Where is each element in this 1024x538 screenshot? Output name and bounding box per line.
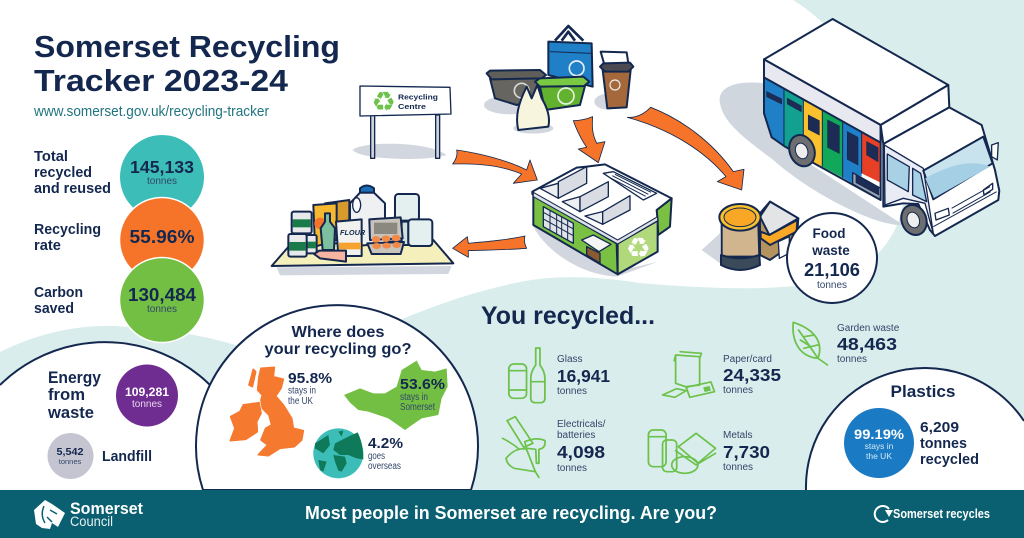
stat: recycling rate: rate [34,237,61,254]
callout: food waste: Food [812,226,846,241]
arrow: sorting centre to products [453,236,527,257]
item: glass: Glass [557,354,583,365]
front wheel [897,201,931,239]
logo: Somerset recycles: Somerset recycles [893,506,990,521]
arrow: containers to sorting centre [573,117,605,163]
illustration: multi-compartment recycling truck [720,19,999,239]
item: garden waste: Garden waste [837,323,900,334]
item: paper and card [663,352,781,397]
stat: carbon saved: saved [34,300,74,317]
entrance [587,247,600,263]
illustration: household containers [484,26,633,134]
landfill figure: tonnes [59,457,82,466]
logo: Somerset recycles [875,506,990,522]
item: glass: tonnes [557,386,587,397]
logo: Somerset Council: Council [70,514,113,529]
text: stays in Somerset: Somerset [400,402,435,413]
illustration: sorting facility building [532,164,672,277]
panel: plastics [806,368,1024,490]
item: glass: 16,941 [557,366,610,386]
cab [883,107,999,236]
panel: where does your recycling go [196,305,478,490]
item: glass [509,348,610,403]
stat: recycling rate: Recycling [34,221,101,238]
callout: food waste: tonnes [817,280,847,291]
icon: cans and foil trays [648,430,716,473]
flour: FLOUR [340,228,366,237]
text: goes overseas [368,435,403,472]
illustration: recycling centre sign: ♻ [371,87,396,118]
panel: energy from waste and landfill: waste [47,403,94,422]
boxes [325,200,349,230]
text: goes overseas: 4.2% [368,435,403,452]
stat: recycling rate [34,198,204,282]
callout: food waste: 21,106 [804,260,860,280]
text: stays in the UK: 95.8% [288,370,332,387]
plastics tonnage: tonnes [920,435,967,452]
stat: total recycled and reused: 145,133 [130,157,194,177]
icon: green box [535,77,589,110]
landfill figure [48,433,152,479]
text: goes overseas: overseas [368,461,401,472]
soap [321,213,335,250]
egg box [367,217,404,254]
panel: plastics: Plastics [890,382,956,401]
title: Tracker 2023-24 [34,63,289,98]
icon: blue bag [548,26,593,87]
heading: you recycled: You recycled... [481,302,655,330]
arrow: to food waste plant [627,107,744,190]
energy from waste figure: 109,281 [125,385,169,399]
arrow: sign to sorting centre [453,150,537,183]
text: stays in the UK: the UK [288,396,313,407]
item: garden waste: tonnes [837,354,867,365]
panel: where does your recycling go: Where does [292,324,385,341]
stat: total recycled and reused: tonnes [147,176,177,187]
landfill figure: 5,542 [56,447,84,458]
callout: food waste: waste [811,243,850,258]
milk jug [350,185,385,247]
item: metals: 7,730 [723,442,770,462]
text: goes overseas: goes [368,451,385,462]
stat: carbon saved: 130,484 [128,285,196,305]
panel: energy from waste and landfill: Energy [48,368,101,387]
title: Somerset Recycling [34,29,340,64]
sorting bays [540,167,630,224]
item: metals [648,430,770,473]
item: paper and card: tonnes [723,385,753,396]
plastics tonnage [920,419,979,468]
stat: total recycled and reused: recycled [34,164,92,181]
stat: carbon saved [34,258,204,342]
illustration: recycling centre sign: Recycling [398,93,438,102]
panel: energy from waste and landfill [0,342,255,490]
energy from waste figure [116,364,178,426]
item: electricals and batteries [503,417,606,477]
item: electricals and batteries: tonnes [557,463,587,474]
title [34,29,340,98]
icon: brown bin [600,52,633,108]
roof vent [603,172,657,200]
item: garden waste [793,322,900,365]
item: electricals and batteries: 4,098 [557,442,605,462]
text: stays in Somerset [400,376,445,413]
stat: total recycled and reused: and reused [34,180,111,197]
hatches [767,92,879,195]
text: stays in the UK [288,370,332,407]
slogan: Most people in Somerset are recycling. Are you? [305,503,717,523]
compartments [764,77,881,200]
stat: total recycled and reused: Total [34,148,68,165]
item: electricals and batteries: Electricals/ [557,419,606,430]
recycling symbol on wall: ♻ [626,232,651,265]
item: paper and card: Paper/card [723,354,772,365]
flour [336,219,366,256]
icon: UK and Ireland map [230,367,303,456]
plastics stays in the UK circle: stays in [865,441,894,451]
plastics stays in the UK circle: the UK [866,451,892,461]
plastics stays in the UK circle: 99.19% [854,426,905,442]
illustration: recycling centre sign [353,86,451,159]
text: stays in Somerset: 53.6% [400,376,445,393]
tins [288,212,317,257]
glass wall [543,207,573,243]
icon: Somerset map [344,361,448,430]
illustration: recycled products on table [272,185,453,275]
text: stays in the UK: stays in [288,386,316,396]
icon: leaf [793,322,828,365]
icon: carton and newspaper [663,352,714,397]
item: metals: tonnes [723,462,753,473]
icon: globe [313,428,363,478]
toilet rolls [395,194,432,246]
truck shadow [720,82,903,225]
plastics stays in the UK circle [844,408,914,478]
logo: Somerset Council: Somerset [70,499,143,518]
footer band [0,490,1024,538]
icon: grey box [487,70,546,105]
stat: total recycled and reused [34,135,204,219]
icon: battery, hair dryer and iron [503,417,545,477]
item: electricals and batteries: batteries [557,430,595,441]
illustration: recycling centre sign: Centre [398,102,426,111]
item: metals: Metals [723,430,752,441]
plastics tonnage: 6,209 [920,419,959,436]
energy from waste figure: tonnes [132,399,162,410]
stat: carbon saved: tonnes [147,304,177,315]
item: garden waste: 48,463 [837,334,897,354]
text: stays in Somerset: stays in [400,392,428,403]
icon: plastic bag [517,85,549,130]
tube [314,251,346,262]
landfill figure: Landfill [102,448,152,465]
stat: recycling rate: 55.96% [130,227,194,247]
illustration: anaerobic digestion plant [702,202,798,270]
plastics tonnage: recycled [920,451,979,468]
panel: where does your recycling go: your recycling go? [264,341,412,358]
rear wheel [785,131,819,170]
callout: food waste [787,213,877,303]
icon: jar and bottle [509,348,545,403]
logo: Somerset Council [34,499,143,529]
website link: www.somerset.gov.uk/recycling-tracker [33,104,269,120]
panel: energy from waste and landfill: from [48,385,85,404]
stat: carbon saved: Carbon [34,284,83,301]
item: paper and card: 24,335 [723,365,781,385]
